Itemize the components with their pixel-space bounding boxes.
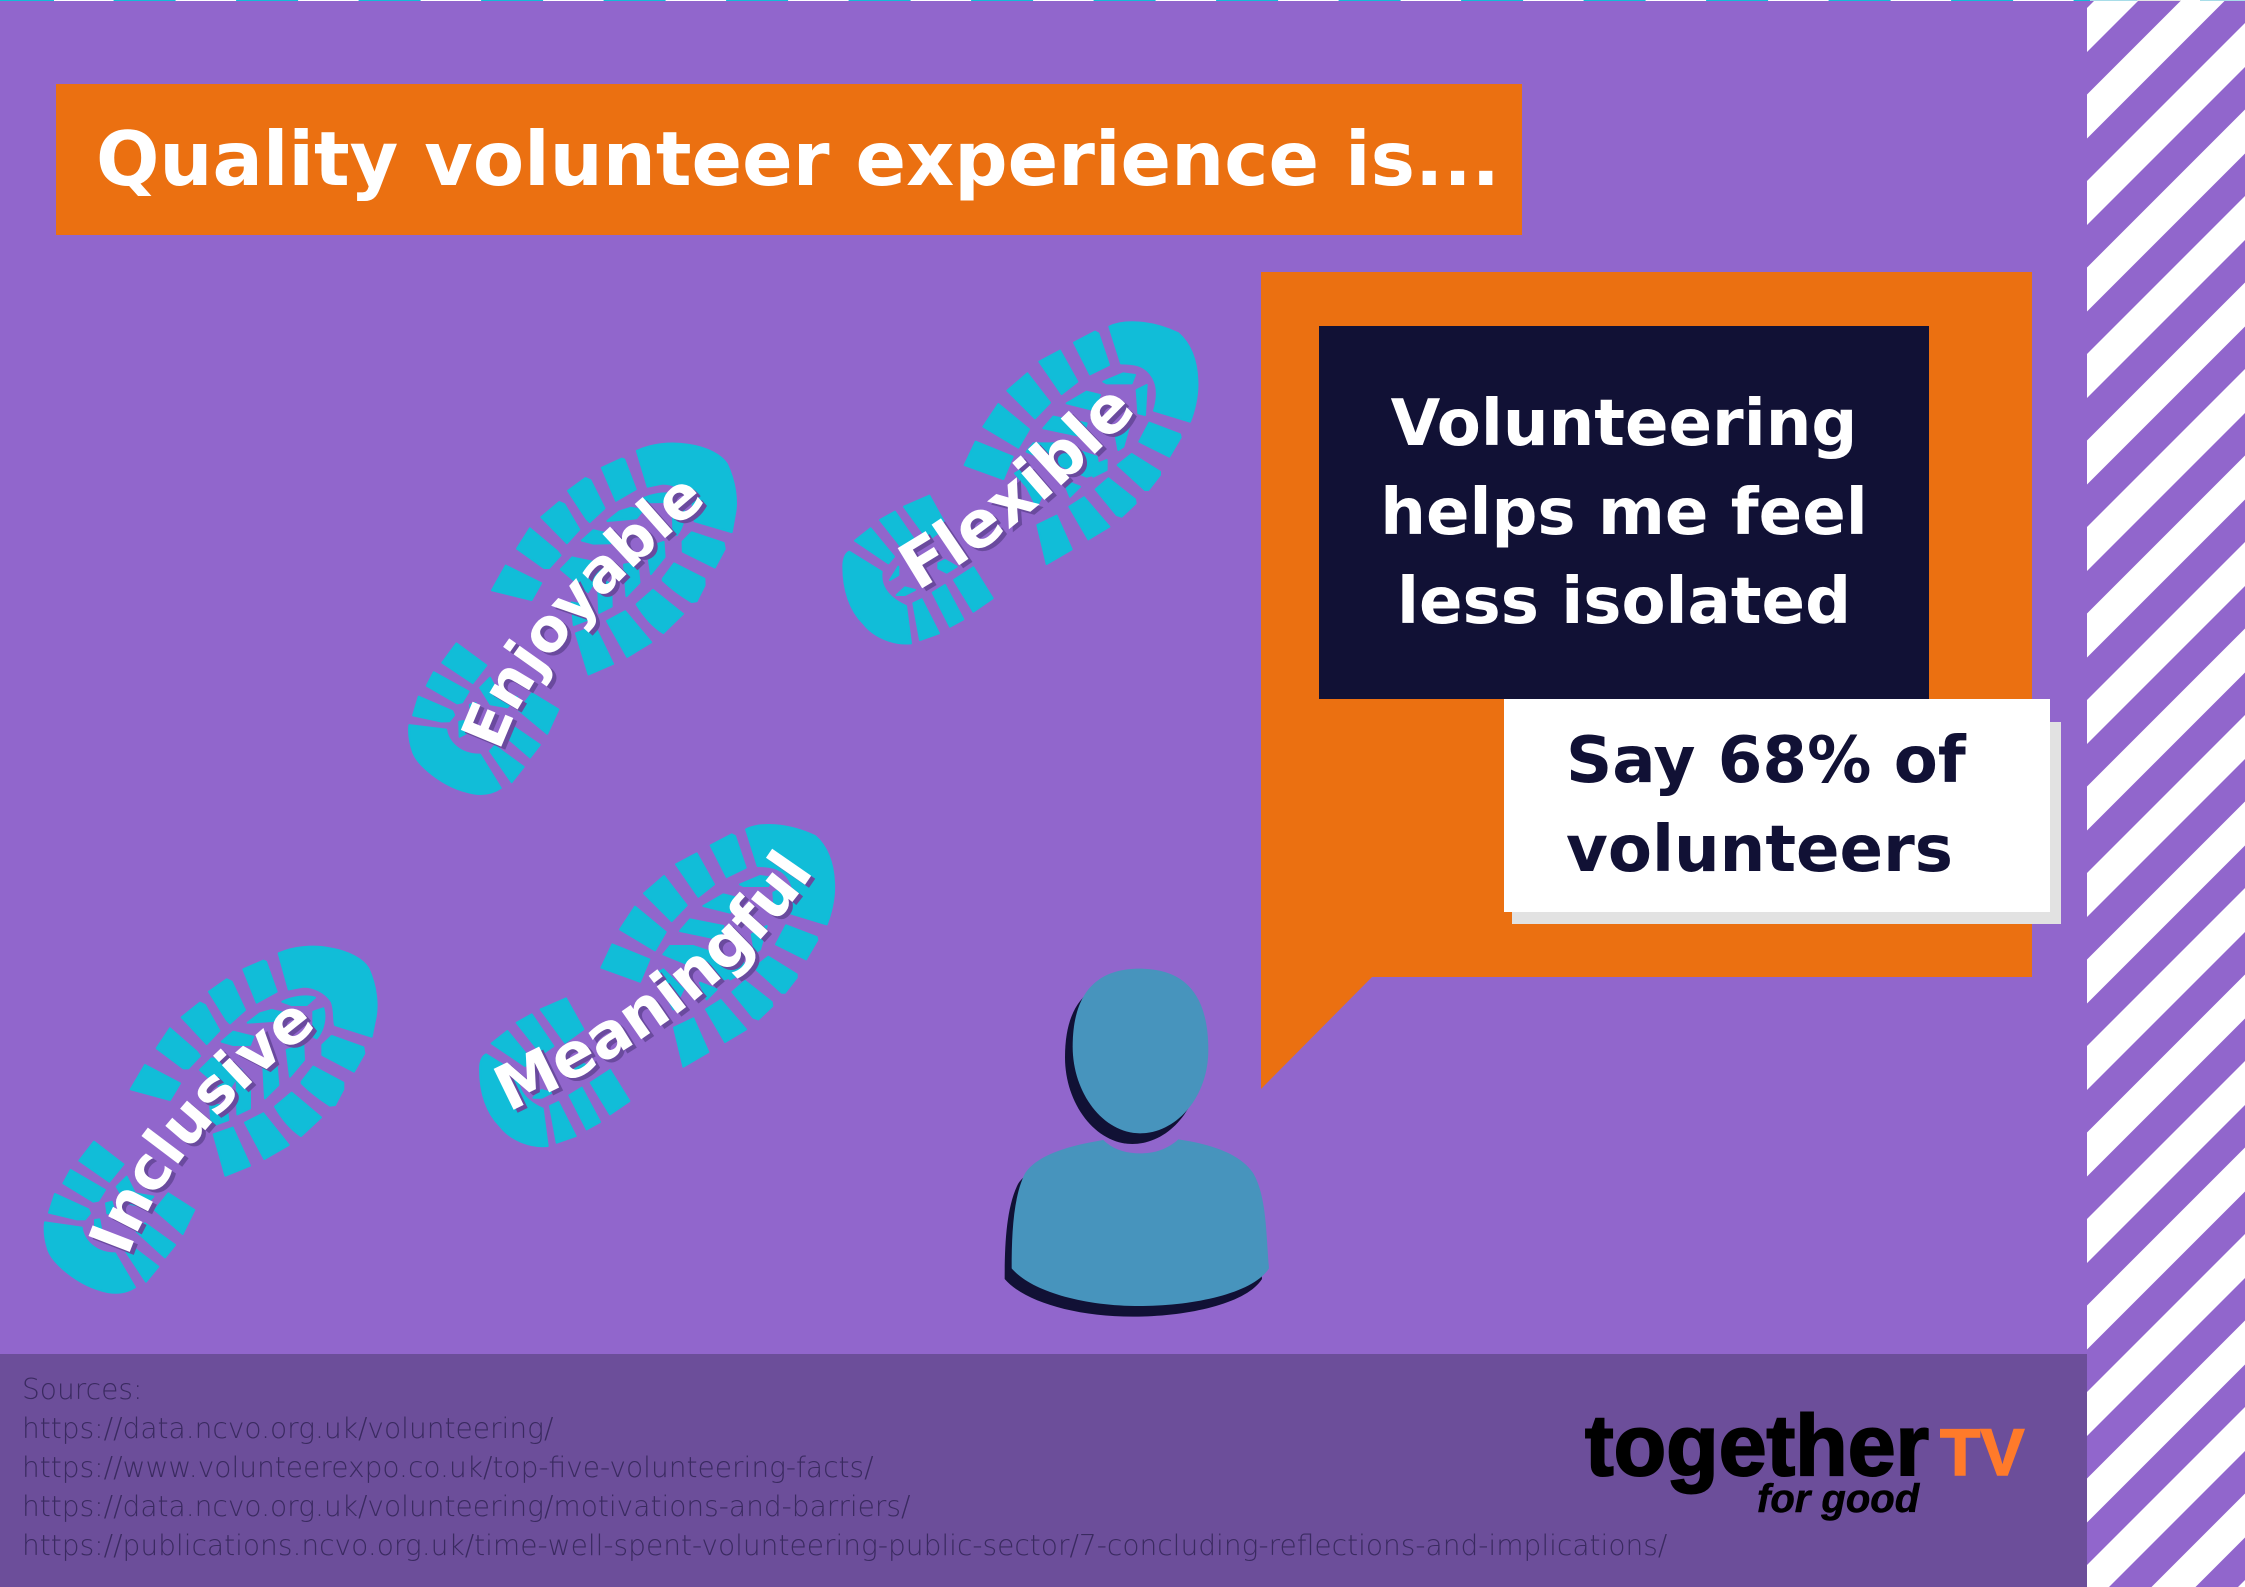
label: Meaningful: Meaningful [494,848,816,1113]
sources list: https://www.volunteerexpo.co.uk/top-five-volunteering-facts/ [22,1451,874,1484]
icon: person [1005,969,1269,1317]
label: Inclusive: Inclusive [88,1008,317,1255]
title text: Quality volunteer experience is... [96,116,1500,203]
statistic card [1504,699,2061,924]
footprint: Inclusive [44,946,378,1294]
quote text: Volunteering [1391,386,1857,461]
quote text: less isolated [1397,564,1851,639]
sources list: https://data.ncvo.org.uk/volunteering/motivations-and-barriers/ [22,1490,911,1523]
label: Enjoyable: Enjoyable [460,484,707,750]
footprint: Enjoyable [408,442,737,795]
logo: together TV for good: TV [1940,1415,2024,1489]
speech bubble [1261,272,2061,1089]
sources list: https://publications.ncvo.org.uk/time-well-spent-volunteering-public-sector/7-concluding-reflections-and-implications/ [22,1529,1668,1562]
logo: together TV for good [1585,1398,2024,1521]
quote panel [1319,326,1929,699]
statistic text: Say 68% of [1566,723,1967,798]
label: Flexible: Flexible [898,395,1137,592]
quote text: helps me feel [1380,475,1868,550]
sources list: Sources: [22,1373,142,1406]
logo: together TV for good: together [1585,1398,1929,1494]
logo: together TV for good: for good [1757,1477,1921,1521]
title banner [56,84,1522,235]
footer band [0,1354,2087,1587]
sources list: https://data.ncvo.org.uk/volunteering/ [22,1412,554,1445]
footprint: Meaningful [479,824,836,1148]
statistic text: volunteers [1566,812,1953,887]
footprint: Flexible [842,321,1198,644]
